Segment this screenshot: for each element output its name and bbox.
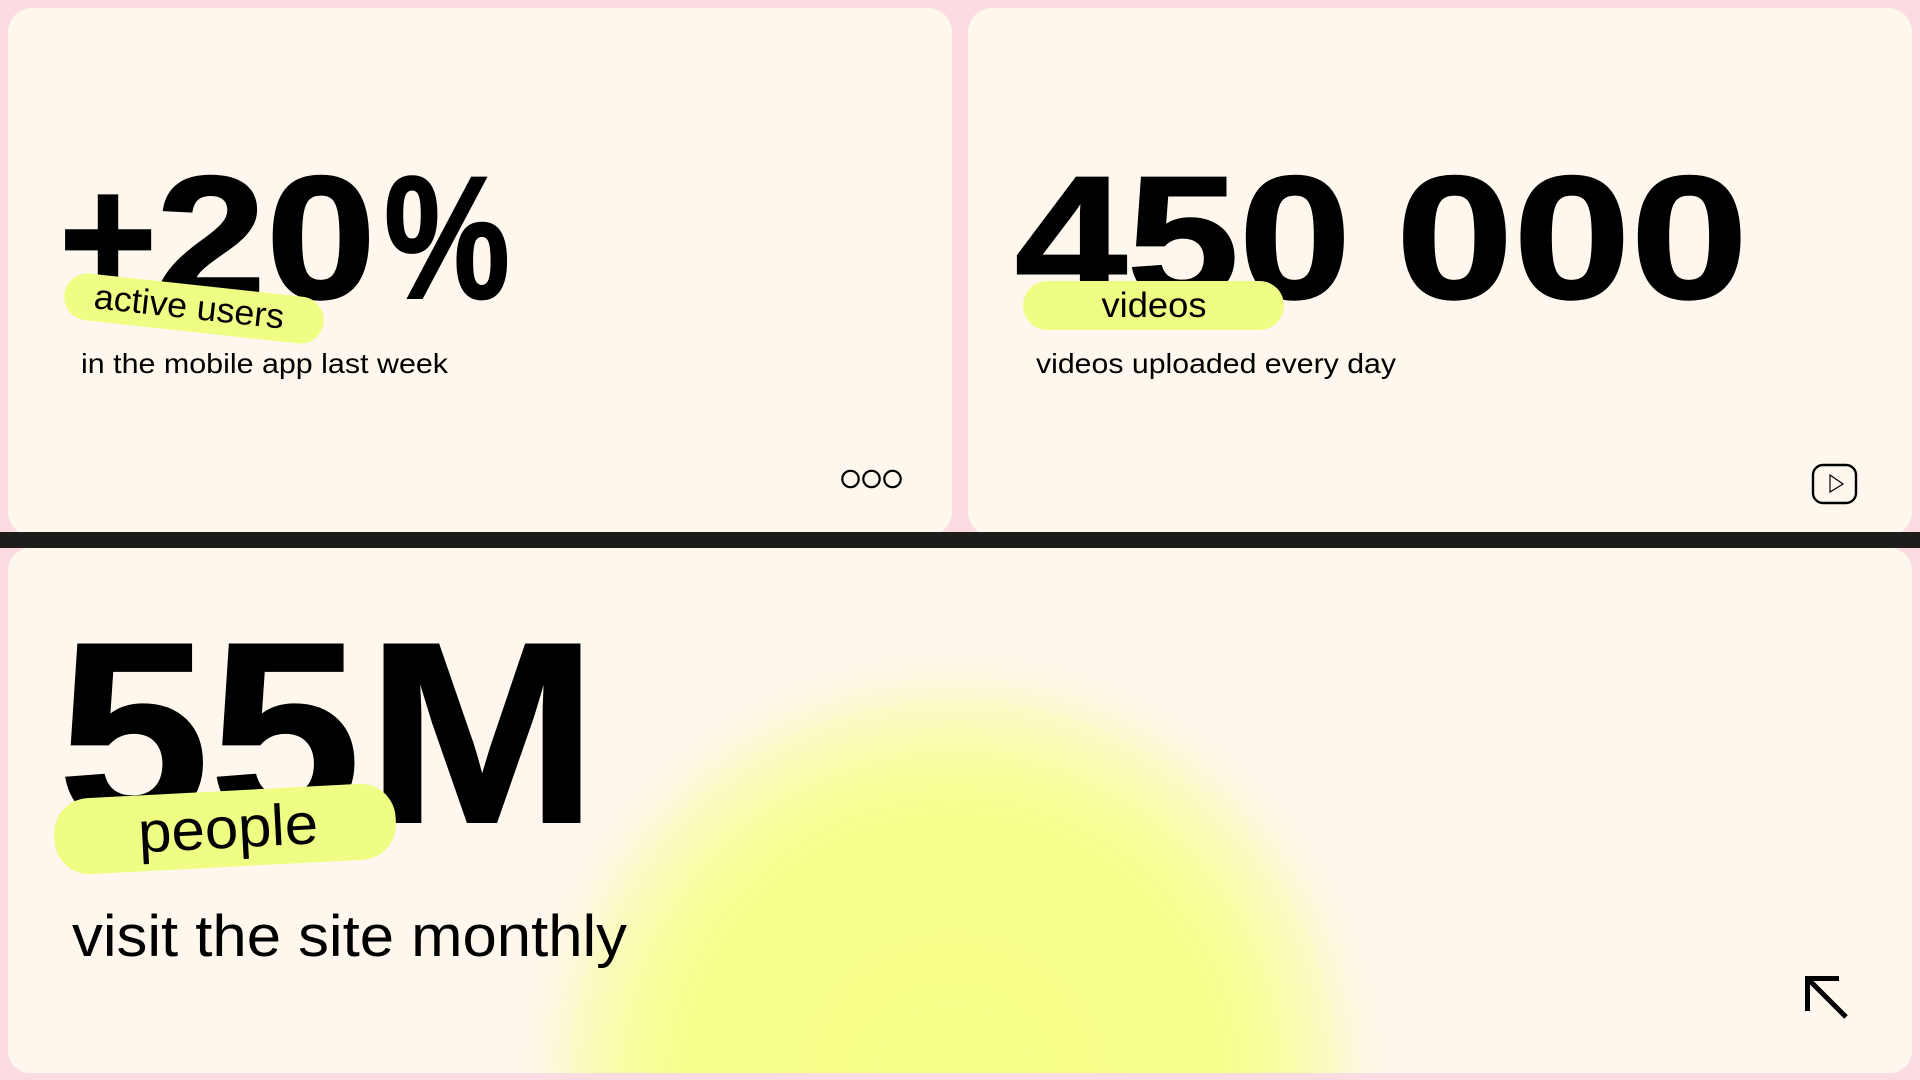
highlight pill: videos <box>1023 281 1284 330</box>
highlight pill: people <box>52 782 398 876</box>
panel: monthly visitors <box>8 548 1912 1073</box>
big number: 450 000: 450 <box>1015 141 1351 336</box>
big number: 55M <box>58 588 598 877</box>
icon: play button <box>1813 465 1856 503</box>
big number: +20% <box>59 141 510 336</box>
big number: 450 000: 000 <box>1396 141 1748 336</box>
big number: 450 000 <box>1015 141 1748 336</box>
highlight pill: active users <box>62 271 326 346</box>
highlight pill: active users: active users <box>92 277 286 337</box>
panel: active users <box>8 8 952 536</box>
icon: three circles <box>842 471 901 487</box>
card background <box>968 8 1912 536</box>
caption: visit the site monthly: visit the site monthly <box>72 904 627 969</box>
big number: 55M: M <box>366 588 598 877</box>
card background <box>8 548 1912 1073</box>
panel: videos <box>968 8 1912 536</box>
big number: 55M: 55 <box>58 588 361 877</box>
highlight pill: videos: videos <box>1102 286 1206 325</box>
divider bar <box>0 532 1920 548</box>
card background <box>8 8 952 536</box>
highlight pill: people: people <box>136 791 320 866</box>
big number: +20%: + <box>59 141 157 336</box>
caption: videos uploaded every day: videos uploaded every day <box>1036 348 1396 379</box>
caption: in the mobile app last week: in the mobile app last week <box>81 348 449 379</box>
icon: arrow pointing up-left <box>1808 978 1846 1017</box>
yellow glow <box>503 635 1403 1073</box>
big number: +20%: 20 <box>156 141 376 336</box>
big number: +20%: % <box>384 141 510 336</box>
